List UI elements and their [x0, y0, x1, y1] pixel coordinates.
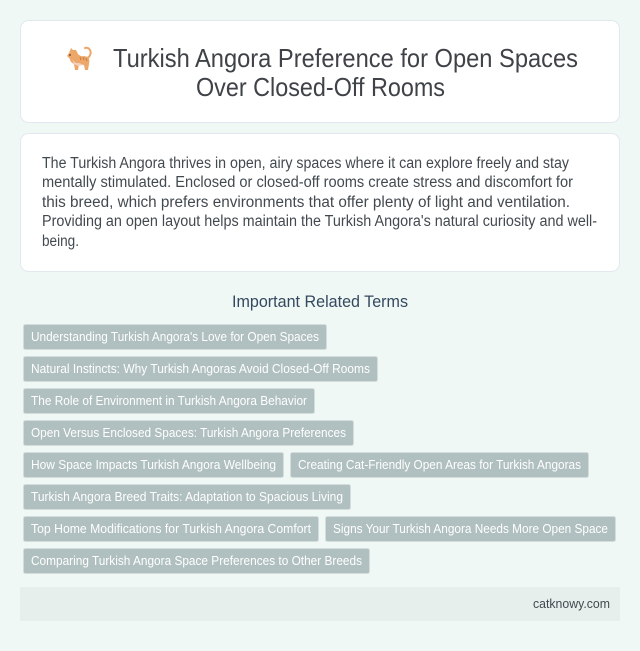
heading: important related terms: Important Related Terms [232, 293, 408, 311]
icon: cat [67, 48, 91, 70]
tag [24, 484, 350, 510]
title [113, 45, 578, 102]
tag: Open Versus Enclosed Spaces: Turkish Angora Preferences [31, 426, 346, 440]
tag [24, 452, 284, 478]
tag: Creating Cat-Friendly Open Areas for Turkish Angoras [298, 458, 581, 472]
tag [24, 356, 378, 382]
tag: How Space Impacts Turkish Angora Wellbeing [31, 458, 276, 472]
panel: title card [20, 20, 620, 122]
panel: related term tags [24, 324, 616, 574]
description text: being. [42, 233, 79, 250]
description text: mentally stimulated. Enclosed or closed-off rooms create stress and discomfort for [42, 174, 573, 191]
panel: description card [20, 134, 620, 272]
description text: this breed, which prefers environments that offer plenty of light and ventilation. [42, 194, 570, 211]
tag [24, 324, 326, 350]
tag [24, 388, 314, 414]
tag [326, 516, 616, 542]
description text: Providing an open layout helps maintain the Turkish Angora's natural curiosity and well- [42, 213, 597, 230]
tag [24, 420, 354, 446]
tag: Understanding Turkish Angora's Love for Open Spaces [31, 330, 319, 344]
title: Turkish Angora Preference for Open Spaces [113, 45, 578, 73]
tag: Comparing Turkish Angora Space Preferences to Other Breeds [31, 554, 362, 568]
tag: The Role of Environment in Turkish Angora Behavior [31, 394, 307, 408]
footer [20, 587, 620, 621]
tag: Signs Your Turkish Angora Needs More Open Space [333, 522, 608, 536]
tag [24, 516, 318, 542]
tag: Turkish Angora Breed Traits: Adaptation to Spacious Living [31, 490, 343, 504]
tag [24, 548, 370, 574]
footer site name: catknowy.com [533, 596, 610, 611]
tag: Top Home Modifications for Turkish Angora Comfort [31, 522, 312, 536]
description text: The Turkish Angora thrives in open, airy spaces where it can explore freely and stay [42, 155, 569, 172]
tag [290, 452, 588, 478]
tag: Natural Instincts: Why Turkish Angoras Avoid Closed-Off Rooms [31, 362, 370, 376]
title: Over Closed-Off Rooms [196, 74, 445, 102]
description text [42, 155, 597, 250]
